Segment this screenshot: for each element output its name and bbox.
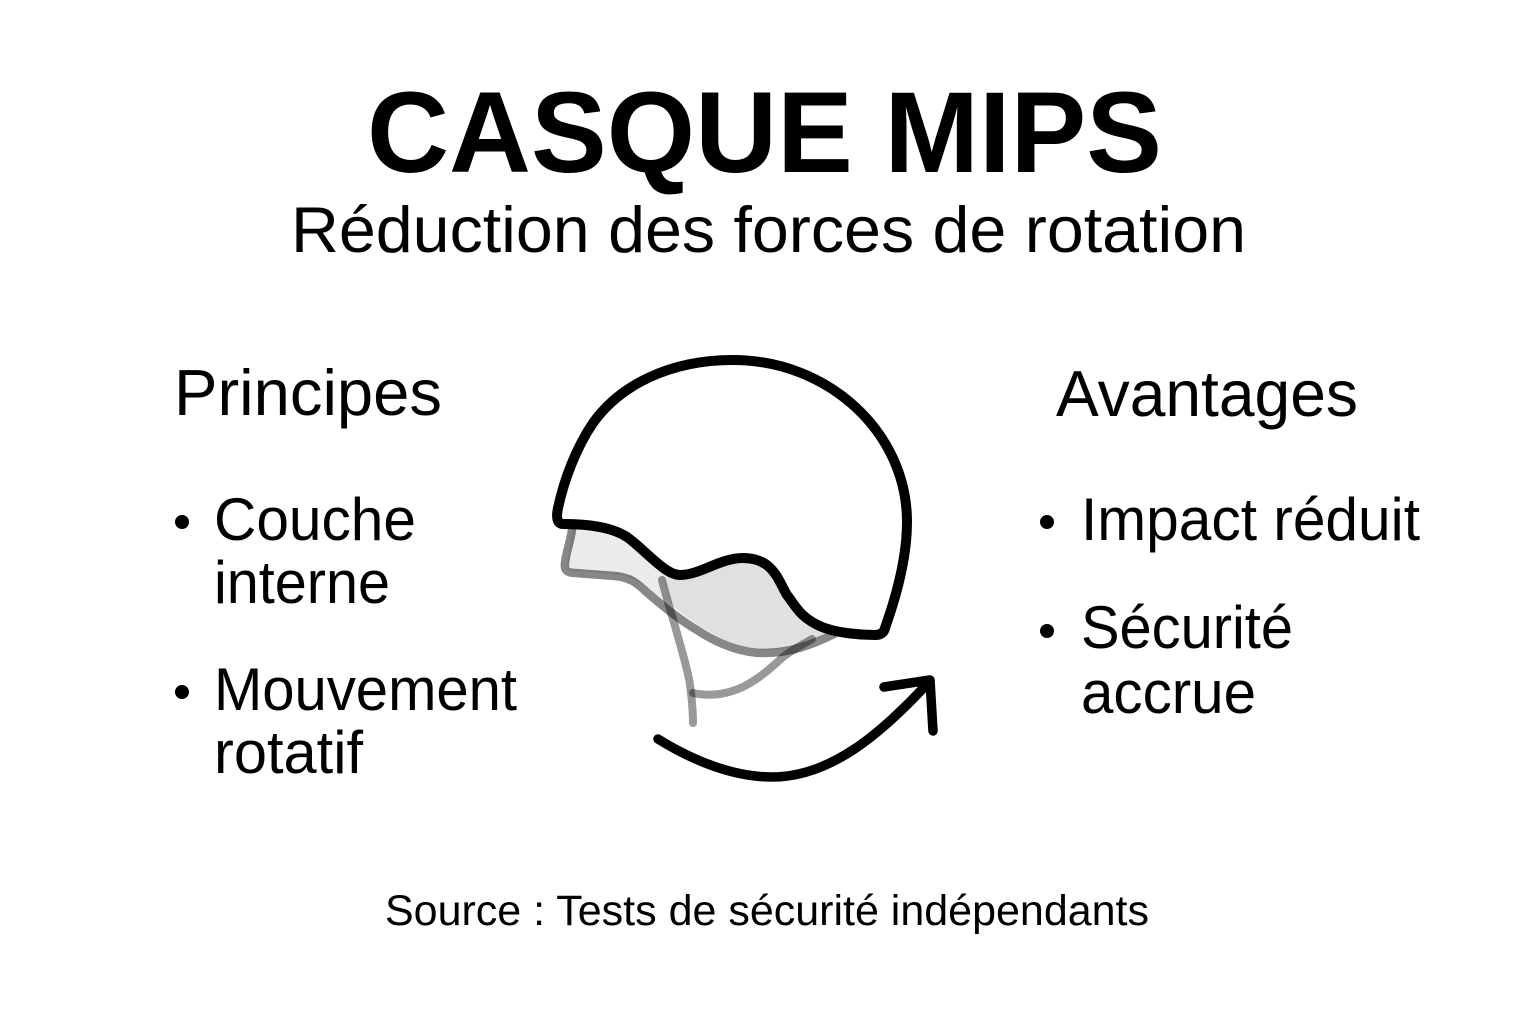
- subtitle: Réduction des forces de rotation: [291, 193, 1246, 266]
- bullet item: couche interne: interne: [214, 549, 390, 616]
- bullet item: couche interne: [175, 486, 416, 616]
- inner liner outline: [565, 530, 834, 653]
- bullet item: couche interne: Couche: [214, 486, 416, 553]
- icon: helmet: [557, 360, 907, 723]
- title: CASQUE MIPS: [367, 69, 1162, 197]
- bullet item: mouvement rotatif: [175, 656, 517, 786]
- helmet liner fill: left: [567, 526, 672, 604]
- bullet item: mouvement rotatif: Mouvement: [214, 656, 517, 723]
- heading: principes: Principes: [174, 356, 442, 429]
- heading: avantages: Avantages: [1056, 357, 1358, 430]
- panel: principes: [174, 356, 517, 786]
- outer shell: [557, 360, 907, 635]
- bullet item: impact reduit: Impact réduit: [1081, 486, 1420, 553]
- bullet item: securite accrue: accrue: [1081, 659, 1256, 726]
- helmet liner fill: main: [660, 550, 832, 650]
- bullet item: mouvement rotatif: rotatif: [214, 719, 363, 786]
- arrow: rotation: [658, 680, 933, 777]
- source: Source : Tests de sécurité indépendants: [385, 887, 1149, 935]
- neck strap: [662, 580, 812, 723]
- panel: avantages: [1040, 357, 1420, 726]
- bullet item: securite accrue: Sécurité: [1081, 594, 1293, 661]
- bullet item: securite accrue: [1040, 594, 1293, 726]
